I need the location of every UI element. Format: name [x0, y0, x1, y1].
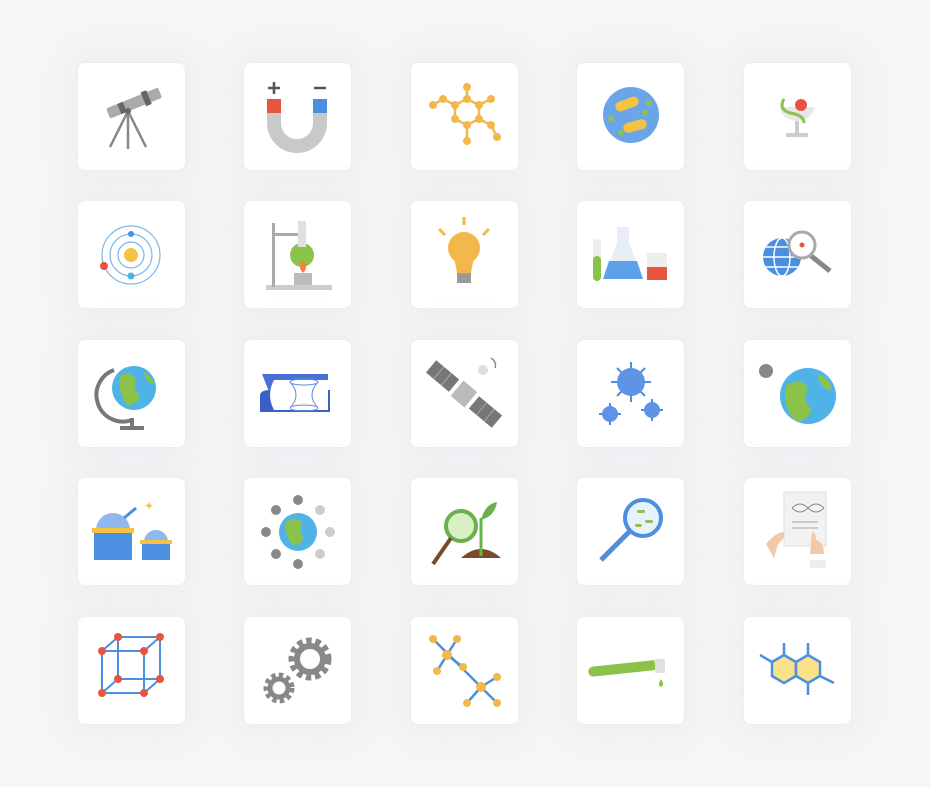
card: network: [411, 617, 518, 724]
card: light bulb: [411, 201, 518, 308]
card: bacteria: [577, 63, 684, 170]
card: telescope: [78, 63, 185, 170]
card: gears: [244, 617, 351, 724]
card: solar system: [78, 201, 185, 308]
card: lab burner: [244, 201, 351, 308]
card: virus: [577, 340, 684, 447]
card: satellite: [411, 340, 518, 447]
card: pharmacy: [744, 63, 851, 170]
card: wormhole: [244, 340, 351, 447]
card: hexagon molecule: [744, 617, 851, 724]
card: magnifier bacteria: [577, 478, 684, 585]
card: molecule: [411, 63, 518, 170]
card: magnet: [244, 63, 351, 170]
card: dna paper: [744, 478, 851, 585]
card: flasks: [577, 201, 684, 308]
card: observatory: ✦: [144, 499, 154, 513]
card: earth moon: [744, 340, 851, 447]
card: test tube pour: [577, 617, 684, 724]
card: globe search: [744, 201, 851, 308]
card: cube lattice: [78, 617, 185, 724]
card: desk globe: [78, 340, 185, 447]
card: plant magnifier: [411, 478, 518, 585]
card: moon phases: [244, 478, 351, 585]
card: observatory: [78, 478, 185, 585]
